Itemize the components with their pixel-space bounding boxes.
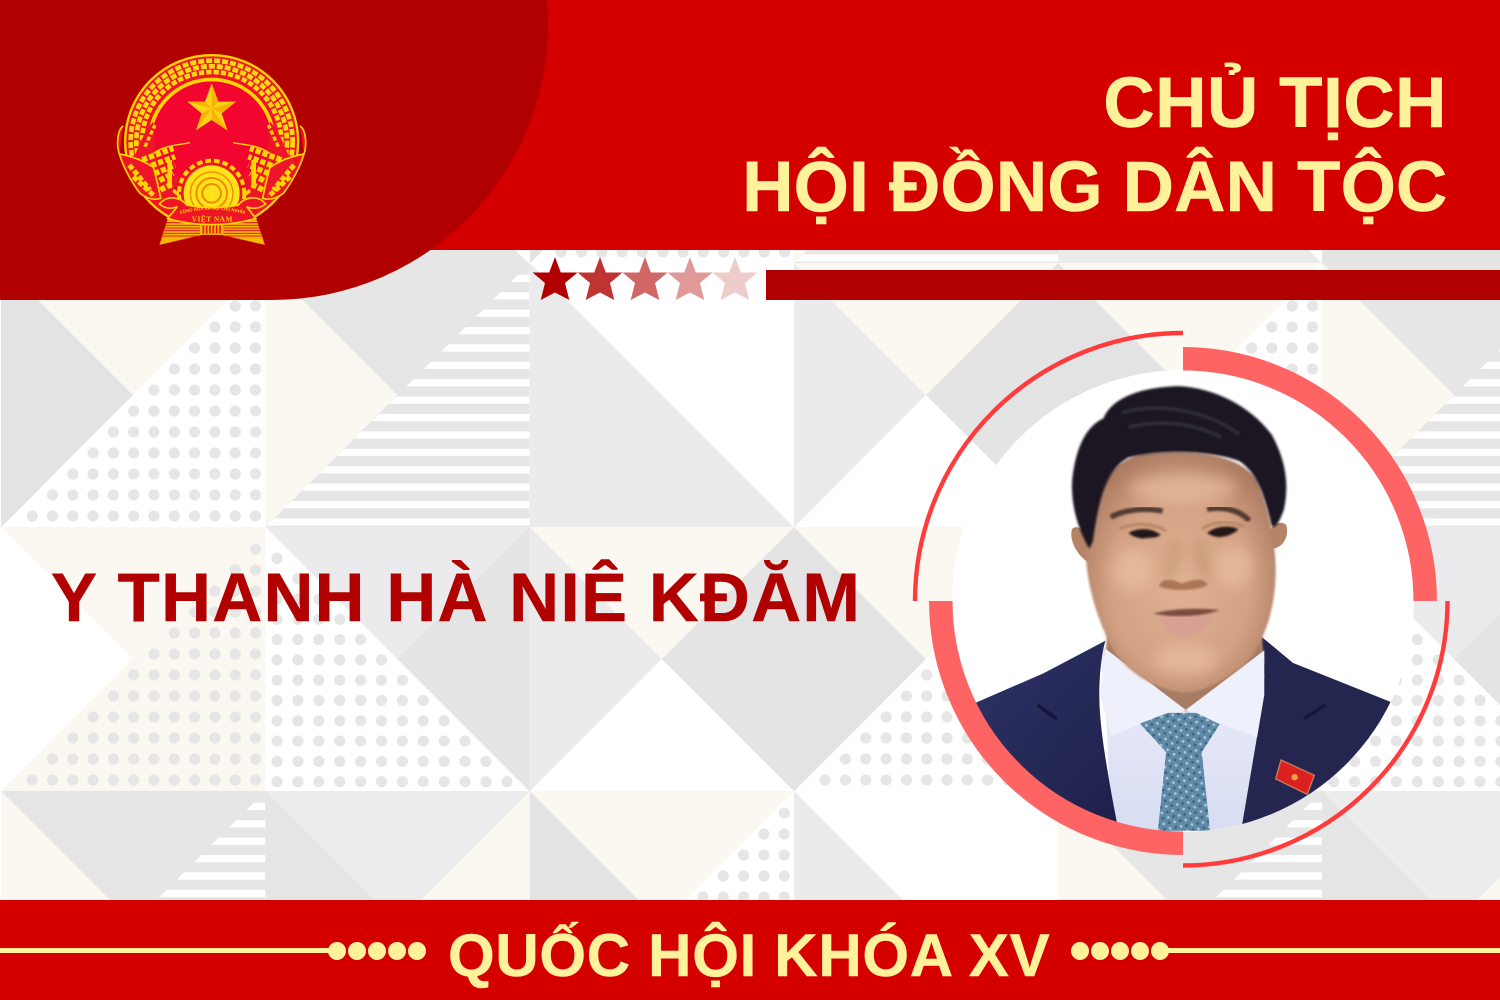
portrait: shirt: [1100, 641, 1264, 831]
stars row: [532, 257, 758, 300]
portrait: eyelid shadows: [1120, 522, 1245, 531]
ring arc bottom-left: [941, 601, 1183, 843]
portrait: lapel notches: [1037, 705, 1326, 719]
portrait: collar: [1100, 649, 1264, 737]
portrait: hair highlight: [1121, 408, 1239, 438]
title line 1: CHỦ TỊCH: [1103, 63, 1447, 143]
portrait: suit right: [1242, 637, 1390, 824]
emblem: outer wreath disc: [124, 54, 299, 229]
emblem: lower grain fill: [129, 165, 294, 197]
footer right ornament: [1071, 942, 1500, 960]
portrait: suit left: [976, 640, 1117, 822]
name: Y THANH HÀ NIÊ KĐĂM: [51, 559, 861, 636]
dark red rule: [766, 270, 1500, 300]
thin arc top-left: [915, 333, 1183, 601]
ring: thick arcs: [941, 359, 1425, 843]
portrait: neck: [1105, 627, 1264, 711]
emblem: cogwheel: [179, 161, 244, 226]
portrait: eyebrows: [1111, 508, 1249, 521]
portrait: eyes: [1129, 527, 1239, 539]
portrait: lapel pin: [1276, 760, 1314, 794]
portrait: nose: [1159, 580, 1208, 590]
emblem: left rice sheaf: [128, 122, 190, 200]
icon: national emblem of Vietnam: [116, 54, 307, 246]
thin arc bottom-right: [1183, 601, 1448, 866]
portrait: face: [1086, 452, 1276, 693]
photo backdrop circle: [952, 370, 1414, 832]
footer text: QUỐC HỘI KHÓA XV: [448, 922, 1050, 989]
emblem: name scroll: [158, 197, 267, 226]
emblem: gold star: [187, 83, 236, 130]
footer band: [0, 900, 1500, 1000]
header band: [0, 0, 1500, 250]
emblem: right ribbon: [263, 126, 306, 199]
title: position: [742, 63, 1448, 227]
emblem: base rays: [159, 217, 265, 245]
emblem: rice grain rings: [128, 58, 295, 156]
emblem: name scroll: CỘNG HÒA XÃ HỘI CHỦ NGHĨA: [180, 206, 245, 214]
portrait: tie: [1140, 713, 1220, 831]
emblem: red inner field: [151, 81, 272, 202]
emblem: left ribbon: [118, 126, 161, 199]
portrait: mouth: [1162, 616, 1210, 635]
emblem: right rice sheaf: [233, 122, 295, 200]
emblem: name scroll: VIỆT NAM: [192, 215, 233, 224]
ring arc top-right: [1183, 359, 1425, 601]
portrait: nose bridge shading: [1166, 541, 1206, 577]
portrait: cheek highlights: [1112, 474, 1252, 674]
portrait photo: [952, 370, 1414, 832]
portrait: hair: [1072, 386, 1286, 549]
title line 2: HỘI ĐỒNG DÂN TỘC: [742, 147, 1448, 227]
dark red emblem panel: [0, 0, 548, 300]
footer left ornament: [0, 942, 426, 960]
ring: thin arcs: [915, 333, 1448, 866]
portrait: ears: [1071, 523, 1287, 563]
